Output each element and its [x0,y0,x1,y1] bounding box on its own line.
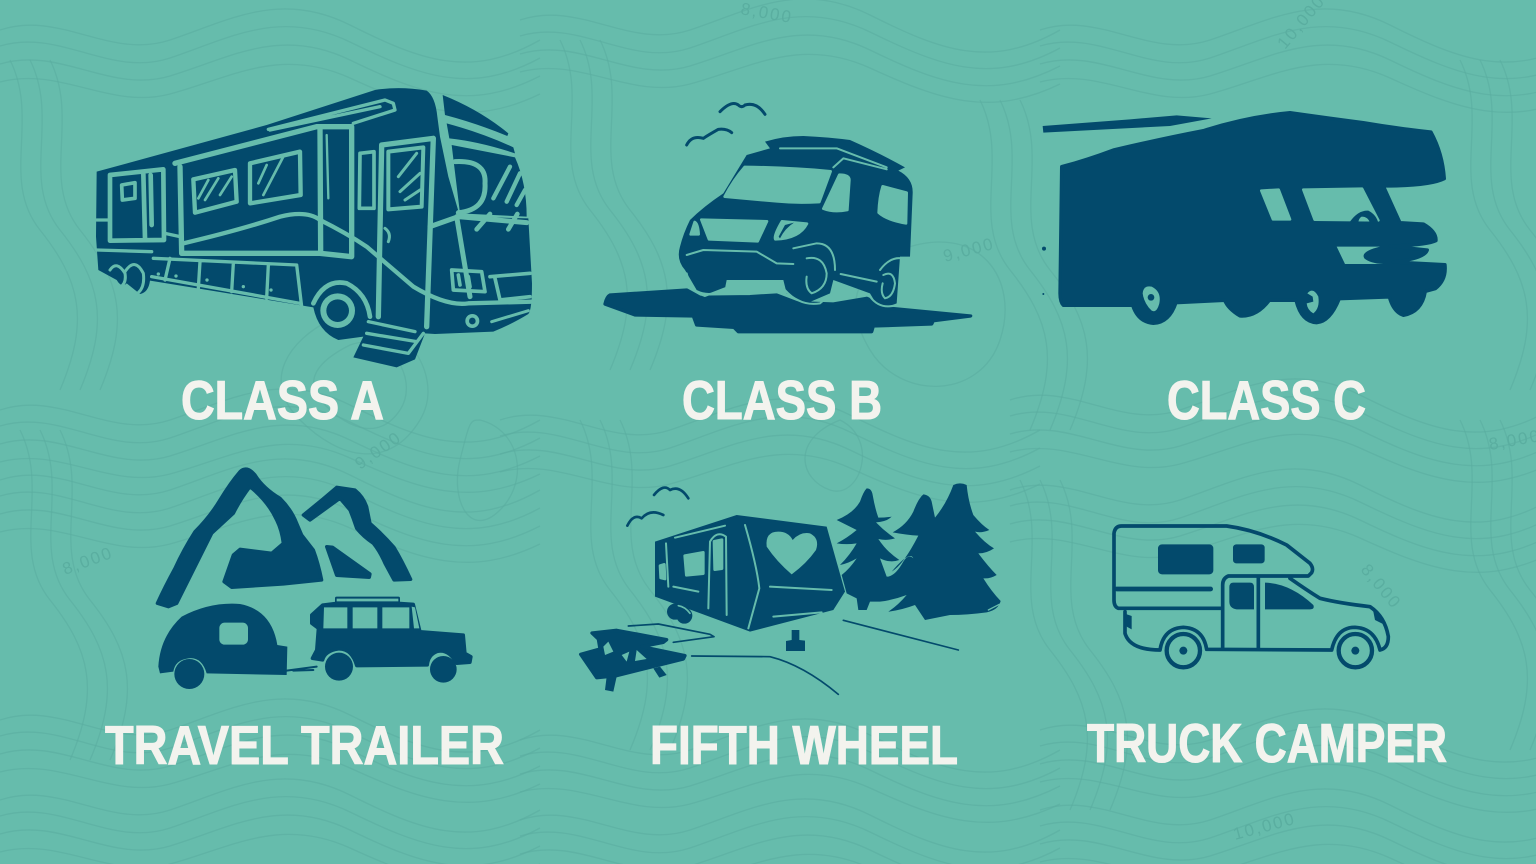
icon: truck camper [1114,526,1388,667]
text: 8,000 [739,0,794,27]
icon: birds [627,488,688,526]
label: Class B: CLASS B [682,369,882,431]
icon: picnic table [581,630,685,692]
text: 8,000 [1357,560,1405,613]
text: 8,000 [60,543,116,579]
icon: pine trees [837,483,1001,620]
icon: fifth wheel with trees and picnic table [581,483,1001,694]
label: Travel Trailer: TRAVEL TRAILER [105,714,504,776]
text: 9,000 [351,428,405,473]
label: Class A: CLASS A [181,369,384,431]
text: 10,000 [1231,809,1298,844]
label: Truck Camper: TRUCK CAMPER [1087,712,1447,774]
icon: birds [687,103,765,145]
text: 9,000 [941,234,997,266]
icon: travel trailer with mountains and SUV [157,469,471,689]
icon: Class B camper van [605,103,971,332]
icon: Class C motorhome [1042,113,1445,323]
icon: Class A motorhome [96,88,532,367]
label: Fifth Wheel: FIFTH WHEEL [650,714,958,776]
label: Class C: CLASS C [1167,369,1366,431]
